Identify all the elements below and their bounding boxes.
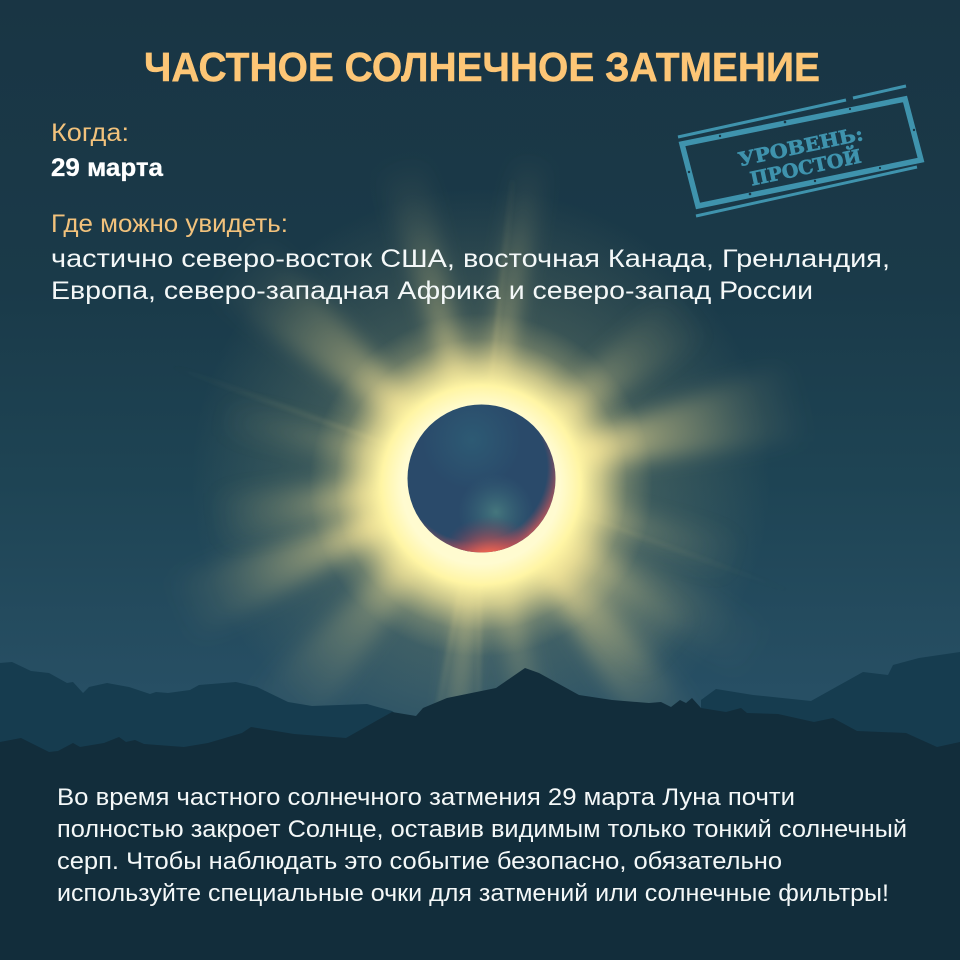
sky halo	[191, 188, 771, 768]
when label: Когда:	[51, 119, 129, 147]
where block	[51, 210, 890, 305]
bottom description	[57, 784, 907, 907]
where text: частично северо-восток США, восточная Канада, Гренландия,	[51, 245, 890, 273]
bottom description: серп. Чтобы наблюдать это событие безопасно, обязательно	[57, 848, 782, 875]
mountains: back range	[0, 652, 960, 770]
stamp frame	[682, 99, 921, 206]
where text: Европа, северо-западная Африка и северо-запад России	[51, 277, 813, 305]
stamp double lines	[678, 86, 917, 216]
when block	[51, 119, 164, 182]
mountains: front range	[0, 668, 960, 960]
where text	[51, 245, 890, 305]
sun glow ring	[309, 313, 653, 657]
bottom description: полностью закроет Солнце, оставив видимым только тонкий солнечный	[57, 816, 907, 843]
stamp text: УРОВЕНЬ:	[736, 123, 865, 171]
moon disk	[408, 404, 556, 552]
bottom description: Во время частного солнечного затмения 29 марта Луна почти	[57, 784, 795, 811]
where label: Где можно увидеть:	[51, 210, 288, 238]
sun corona rays	[98, 80, 881, 878]
stamp text: ПРОСТОЙ	[748, 144, 863, 191]
stamp text	[736, 123, 865, 191]
stamp speckles	[688, 108, 915, 195]
when date: 29 марта	[51, 154, 164, 182]
title: ЧАСТНОЕ СОЛНЕЧНОЕ ЗАТМЕНИЕ	[144, 44, 820, 90]
stamp: difficulty level	[678, 86, 921, 216]
bottom description: используйте специальные очки для затмений или солнечные фильтры!	[57, 880, 889, 907]
